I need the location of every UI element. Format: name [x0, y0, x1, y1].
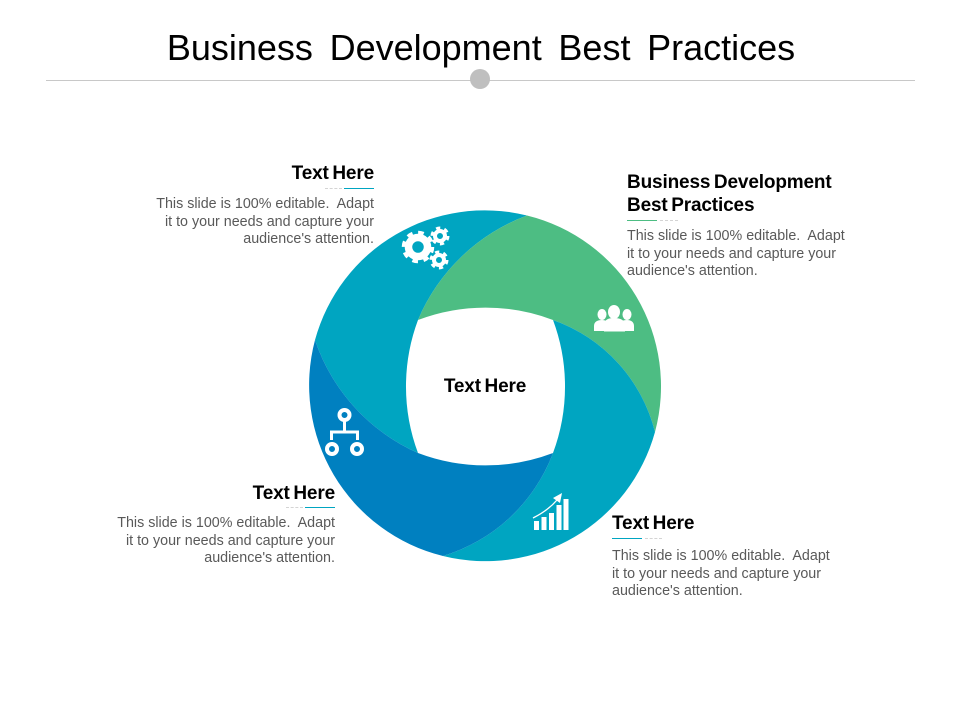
- segment: teal right: [443, 320, 655, 561]
- body text: [117, 515, 335, 566]
- body text: it to your needs and capture your: [627, 246, 836, 262]
- body text: it to your needs and capture your: [612, 566, 821, 582]
- callout: top left: [156, 163, 374, 247]
- heading: [627, 172, 832, 216]
- title: Business Development Best Practices: [167, 27, 795, 68]
- heading: Text Here: [253, 483, 335, 504]
- icon: people: [594, 305, 634, 332]
- body text: This slide is 100% editable. Adapt: [612, 548, 830, 564]
- rule: [305, 507, 335, 508]
- heading: Best Practices: [627, 195, 754, 216]
- rule dashes: [645, 538, 662, 539]
- heading: Business Development: [627, 172, 832, 193]
- body text: [627, 228, 845, 279]
- callout: bottom left: [117, 483, 335, 566]
- body text: [612, 548, 830, 599]
- body text: audience's attention.: [612, 583, 743, 599]
- rule: [344, 188, 374, 189]
- segment: teal left: [315, 210, 527, 453]
- body text: [156, 196, 374, 247]
- icon: hierarchy: [327, 410, 362, 454]
- body text: it to your needs and capture your: [165, 214, 374, 230]
- body text: This slide is 100% editable. Adapt: [627, 228, 845, 244]
- body text: audience's attention.: [243, 231, 374, 247]
- rule: [627, 220, 657, 221]
- segment: green: [418, 216, 661, 432]
- rule: [612, 538, 642, 539]
- callout: bottom right: [612, 513, 830, 599]
- rule dashes: [660, 220, 678, 221]
- rule dashes: [286, 507, 303, 508]
- icon: bar chart with arrow: [533, 493, 568, 530]
- rule dashes: [325, 188, 342, 189]
- body text: This slide is 100% editable. Adapt: [156, 196, 374, 212]
- heading: Text Here: [612, 513, 694, 534]
- body text: it to your needs and capture your: [126, 533, 335, 549]
- body text: audience's attention.: [627, 263, 758, 279]
- center label: Text Here: [444, 376, 526, 397]
- body text: audience's attention.: [204, 550, 335, 566]
- icon: gears: [404, 228, 448, 268]
- callout: top right: [627, 172, 845, 279]
- heading: Text Here: [292, 163, 374, 184]
- body text: This slide is 100% editable. Adapt: [117, 515, 335, 531]
- segment: blue: [309, 340, 553, 556]
